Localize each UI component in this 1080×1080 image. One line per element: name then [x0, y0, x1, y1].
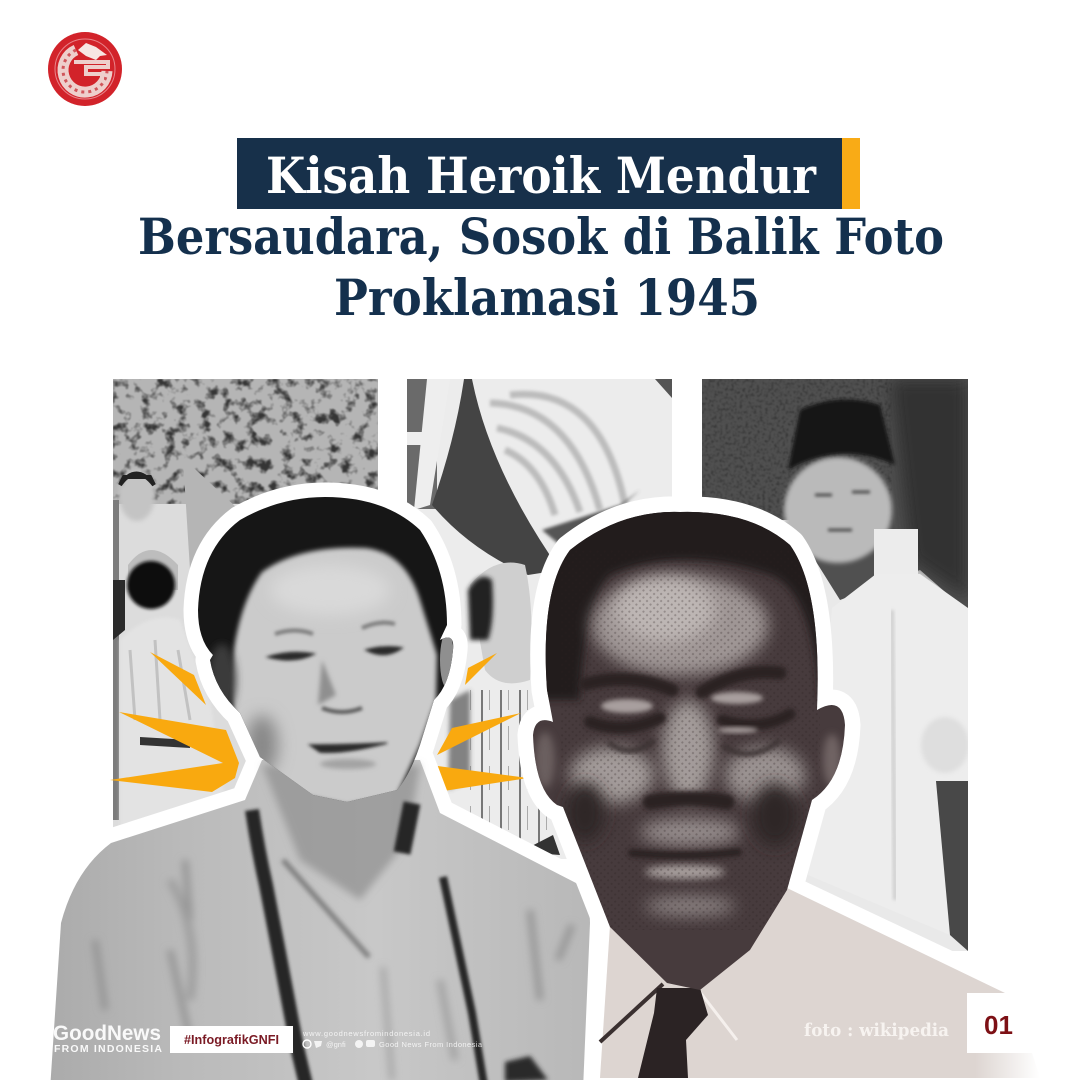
page number box: 01: [984, 1010, 1013, 1040]
left camera strap: [252, 803, 484, 1080]
title line 2: Bersaudara, Sosok di Balik Foto: [138, 207, 944, 266]
footer: GoodNews brand: FROM INDONESIA: [54, 1043, 162, 1055]
right hair: [546, 512, 818, 705]
right head: [525, 500, 855, 1000]
right eyelids: [601, 699, 653, 713]
lower garment: [470, 690, 547, 843]
footer: website and socials: @gnfi: [326, 1040, 346, 1049]
left face: [231, 548, 437, 805]
title line 3: Proklamasi 1945: [334, 268, 760, 327]
dark flag wedge: [432, 379, 560, 575]
right cheeks and nose: [570, 747, 654, 803]
photo credit: foto : wikipedia: [804, 1020, 949, 1041]
bottom right fade: [975, 1053, 1040, 1080]
portrait: Frans Mendur: [50, 490, 590, 1080]
left head: [190, 490, 460, 810]
left shirt: [50, 760, 590, 1080]
title highlight bar: [237, 138, 843, 209]
photo: flag raising: [407, 379, 672, 860]
footer: website and socials: [302, 1029, 483, 1049]
footer: website and socials: www.goodnewsfromindonesia.id: [302, 1029, 430, 1038]
title: [138, 138, 944, 327]
right halftone: [560, 550, 820, 930]
photo: Soekarno reading proclamation: [702, 379, 969, 951]
footer: website and socials: Good News From Indonesia: [379, 1040, 483, 1049]
hooded head: [470, 562, 532, 683]
striped flag: [490, 394, 625, 515]
sunburst rays: [110, 652, 528, 843]
right shirt: [600, 888, 1040, 1078]
title line 1: Kisah Heroik Mendur: [266, 146, 817, 205]
left portrait white outline: [50, 497, 590, 1080]
neck shading: [262, 765, 420, 900]
left features: [268, 623, 402, 752]
title accent block: [842, 138, 860, 209]
footer: GoodNews brand: GoodNews: [53, 1022, 161, 1045]
right tie: [638, 988, 708, 1078]
page number box: [967, 993, 1032, 1053]
right portrait white outline: [533, 512, 1040, 1080]
logo: GNFI red circle: [48, 32, 122, 106]
footer: hashtag tag: [170, 1026, 293, 1053]
footer: GoodNews brand: [53, 1022, 162, 1055]
right forehead: [592, 575, 768, 675]
collar lines: [600, 984, 663, 1042]
photo: crowd: [113, 379, 378, 839]
footer: hashtag tag: #InfografikGNFI: [184, 1033, 279, 1047]
right brows: [586, 672, 790, 855]
portrait: Alex Mendur: [525, 500, 1040, 1080]
